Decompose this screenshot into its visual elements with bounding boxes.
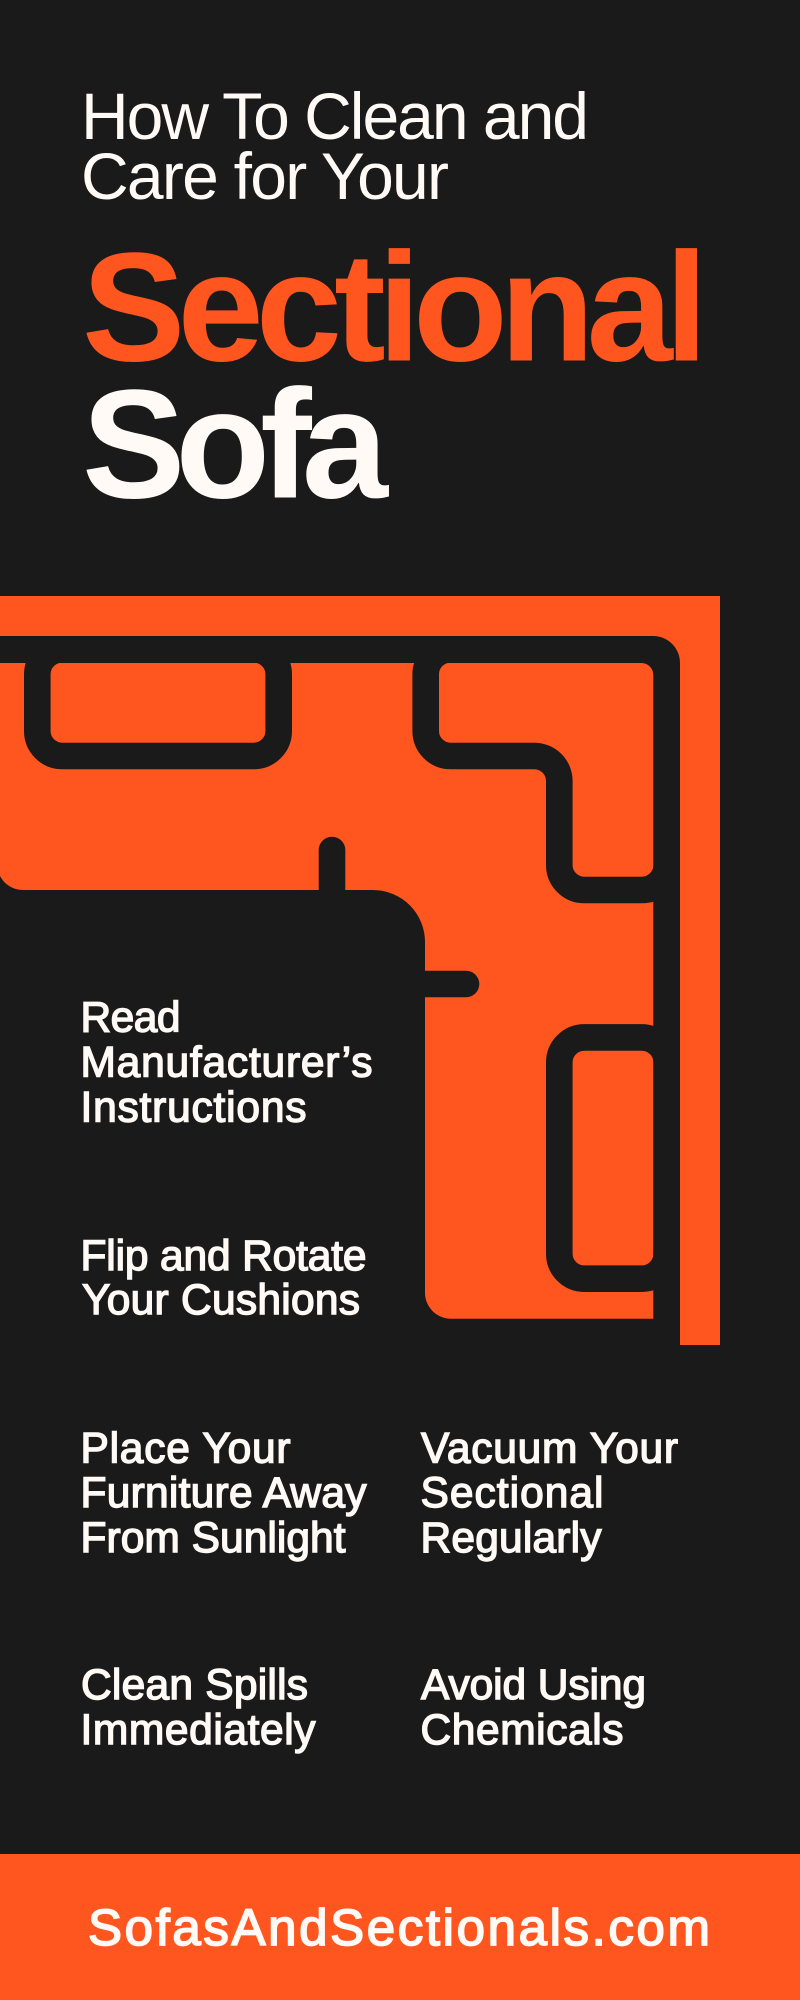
tip: place furniture away from sunlight: Furniture Away <box>80 1470 367 1517</box>
tip: avoid using chemicals: Avoid Using <box>421 1662 646 1709</box>
tip: vacuum sectional regularly <box>420 1425 678 1562</box>
seat notch horizontal <box>420 971 466 997</box>
corner cushion outline <box>426 649 667 890</box>
sofa outer orange back <box>0 596 720 1345</box>
tip: clean spills immediately: Clean Spills <box>81 1662 308 1709</box>
right cushion outline <box>559 1037 667 1279</box>
title keyword: Sofa: Sofa <box>82 358 390 530</box>
footer band <box>0 1854 800 2000</box>
illustration: top-down sectional sofa <box>0 596 720 1345</box>
left cushion outline <box>37 649 279 756</box>
tip: read manufacturer's instructions: Instructions <box>80 1085 306 1132</box>
tip: clean spills immediately <box>80 1662 316 1754</box>
title keyword: Sectional: Sectional <box>82 220 708 394</box>
title intro line two: Care for Your <box>81 139 449 213</box>
tip: vacuum sectional regularly: Sectional <box>420 1470 604 1517</box>
tip: flip and rotate cushions <box>80 1233 366 1324</box>
tip: vacuum sectional regularly: Vacuum Your <box>421 1425 678 1472</box>
tip: read manufacturer's instructions: Manufacturer’s <box>80 1040 372 1087</box>
tip: clean spills immediately: Immediately <box>80 1707 316 1754</box>
seat notch vertical <box>319 850 345 895</box>
tip: avoid using chemicals: Chemicals <box>420 1707 624 1754</box>
tip: avoid using chemicals <box>420 1662 646 1754</box>
tip: flip and rotate cushions: Flip and Rotate <box>80 1233 366 1280</box>
sofa L-shaped seat <box>0 663 653 1319</box>
footer orange background <box>0 1854 800 2000</box>
tip: flip and rotate cushions: Your Cushions <box>82 1277 360 1324</box>
tip: read manufacturer's instructions: Read <box>80 995 180 1042</box>
tip: place furniture away from sunlight: From Sunlight <box>80 1515 346 1562</box>
tip: place furniture away from sunlight <box>80 1425 367 1562</box>
sofa dark outline band <box>0 636 680 1345</box>
tip: place furniture away from sunlight: Place Your <box>80 1425 290 1472</box>
title <box>81 79 708 530</box>
title intro line one: How To Clean and <box>81 79 589 153</box>
tip: read manufacturer's instructions <box>80 995 372 1132</box>
tip: vacuum sectional regularly: Regularly <box>420 1515 602 1562</box>
footer website address: SofasAndSectionals.com <box>88 1899 710 1956</box>
